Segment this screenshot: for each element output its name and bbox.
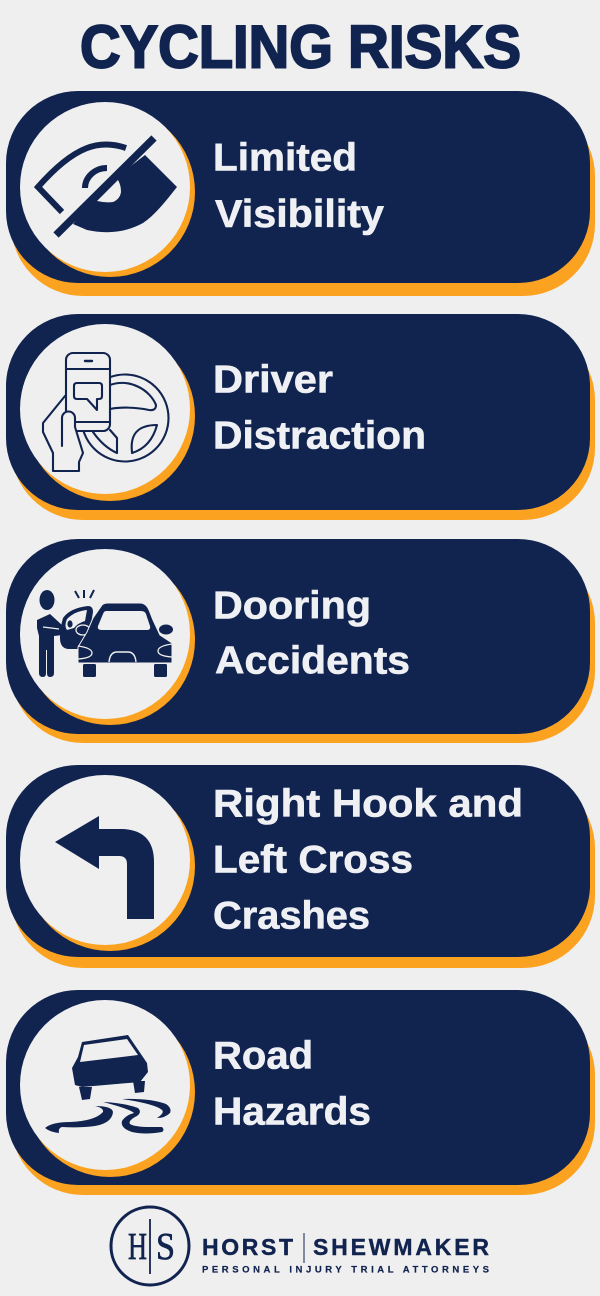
panel: road hazards <box>6 990 595 1195</box>
heading: dooring accidents: Accidents <box>215 640 410 682</box>
logo: Horst Shewmaker <box>111 1207 489 1285</box>
heading: limited visibility: Limited <box>213 136 357 180</box>
panel: driver distraction <box>6 314 595 520</box>
logo wordmark: HORST <box>202 1234 293 1260</box>
logo mark: H <box>128 1226 147 1268</box>
logo wordmark: SHEWMAKER <box>313 1234 489 1260</box>
panel: right hook and left cross crashes <box>6 765 595 968</box>
heading: right hook and left cross crashes <box>213 782 523 938</box>
heading: limited visibility: Visibility <box>215 193 384 236</box>
heading: road hazards <box>213 1034 371 1134</box>
logo wordmark <box>202 1233 489 1263</box>
heading: right hook and left cross crashes: Left Cross <box>213 838 413 882</box>
icon: skidding car <box>45 1035 170 1134</box>
icon: car door collision <box>37 590 173 677</box>
heading: driver distraction <box>213 358 426 458</box>
panel: dooring accidents <box>6 539 595 743</box>
heading: right hook and left cross crashes: Right Hook and <box>213 782 523 826</box>
logo mark <box>111 1207 189 1285</box>
heading: road hazards: Road <box>213 1034 313 1078</box>
heading: limited visibility <box>213 136 384 236</box>
logo mark: S <box>156 1226 175 1268</box>
title <box>80 14 521 80</box>
heading: dooring accidents <box>213 584 410 682</box>
heading: dooring accidents: Dooring <box>213 584 371 628</box>
icon: crossed-out eye <box>38 138 177 235</box>
title: CYCLING <box>80 14 333 80</box>
logo tagline: PERSONAL INJURY TRIAL ATTORNEYS <box>202 1264 489 1276</box>
panel: limited visibility <box>6 91 595 296</box>
title: RISKS <box>348 14 521 80</box>
icon: left turn arrow <box>55 816 154 919</box>
heading: right hook and left cross crashes: Crashes <box>213 894 370 938</box>
icon: phone and steering wheel <box>43 353 168 471</box>
heading: driver distraction: Distraction <box>213 414 426 458</box>
heading: driver distraction: Driver <box>213 358 333 402</box>
heading: road hazards: Hazards <box>213 1090 371 1134</box>
